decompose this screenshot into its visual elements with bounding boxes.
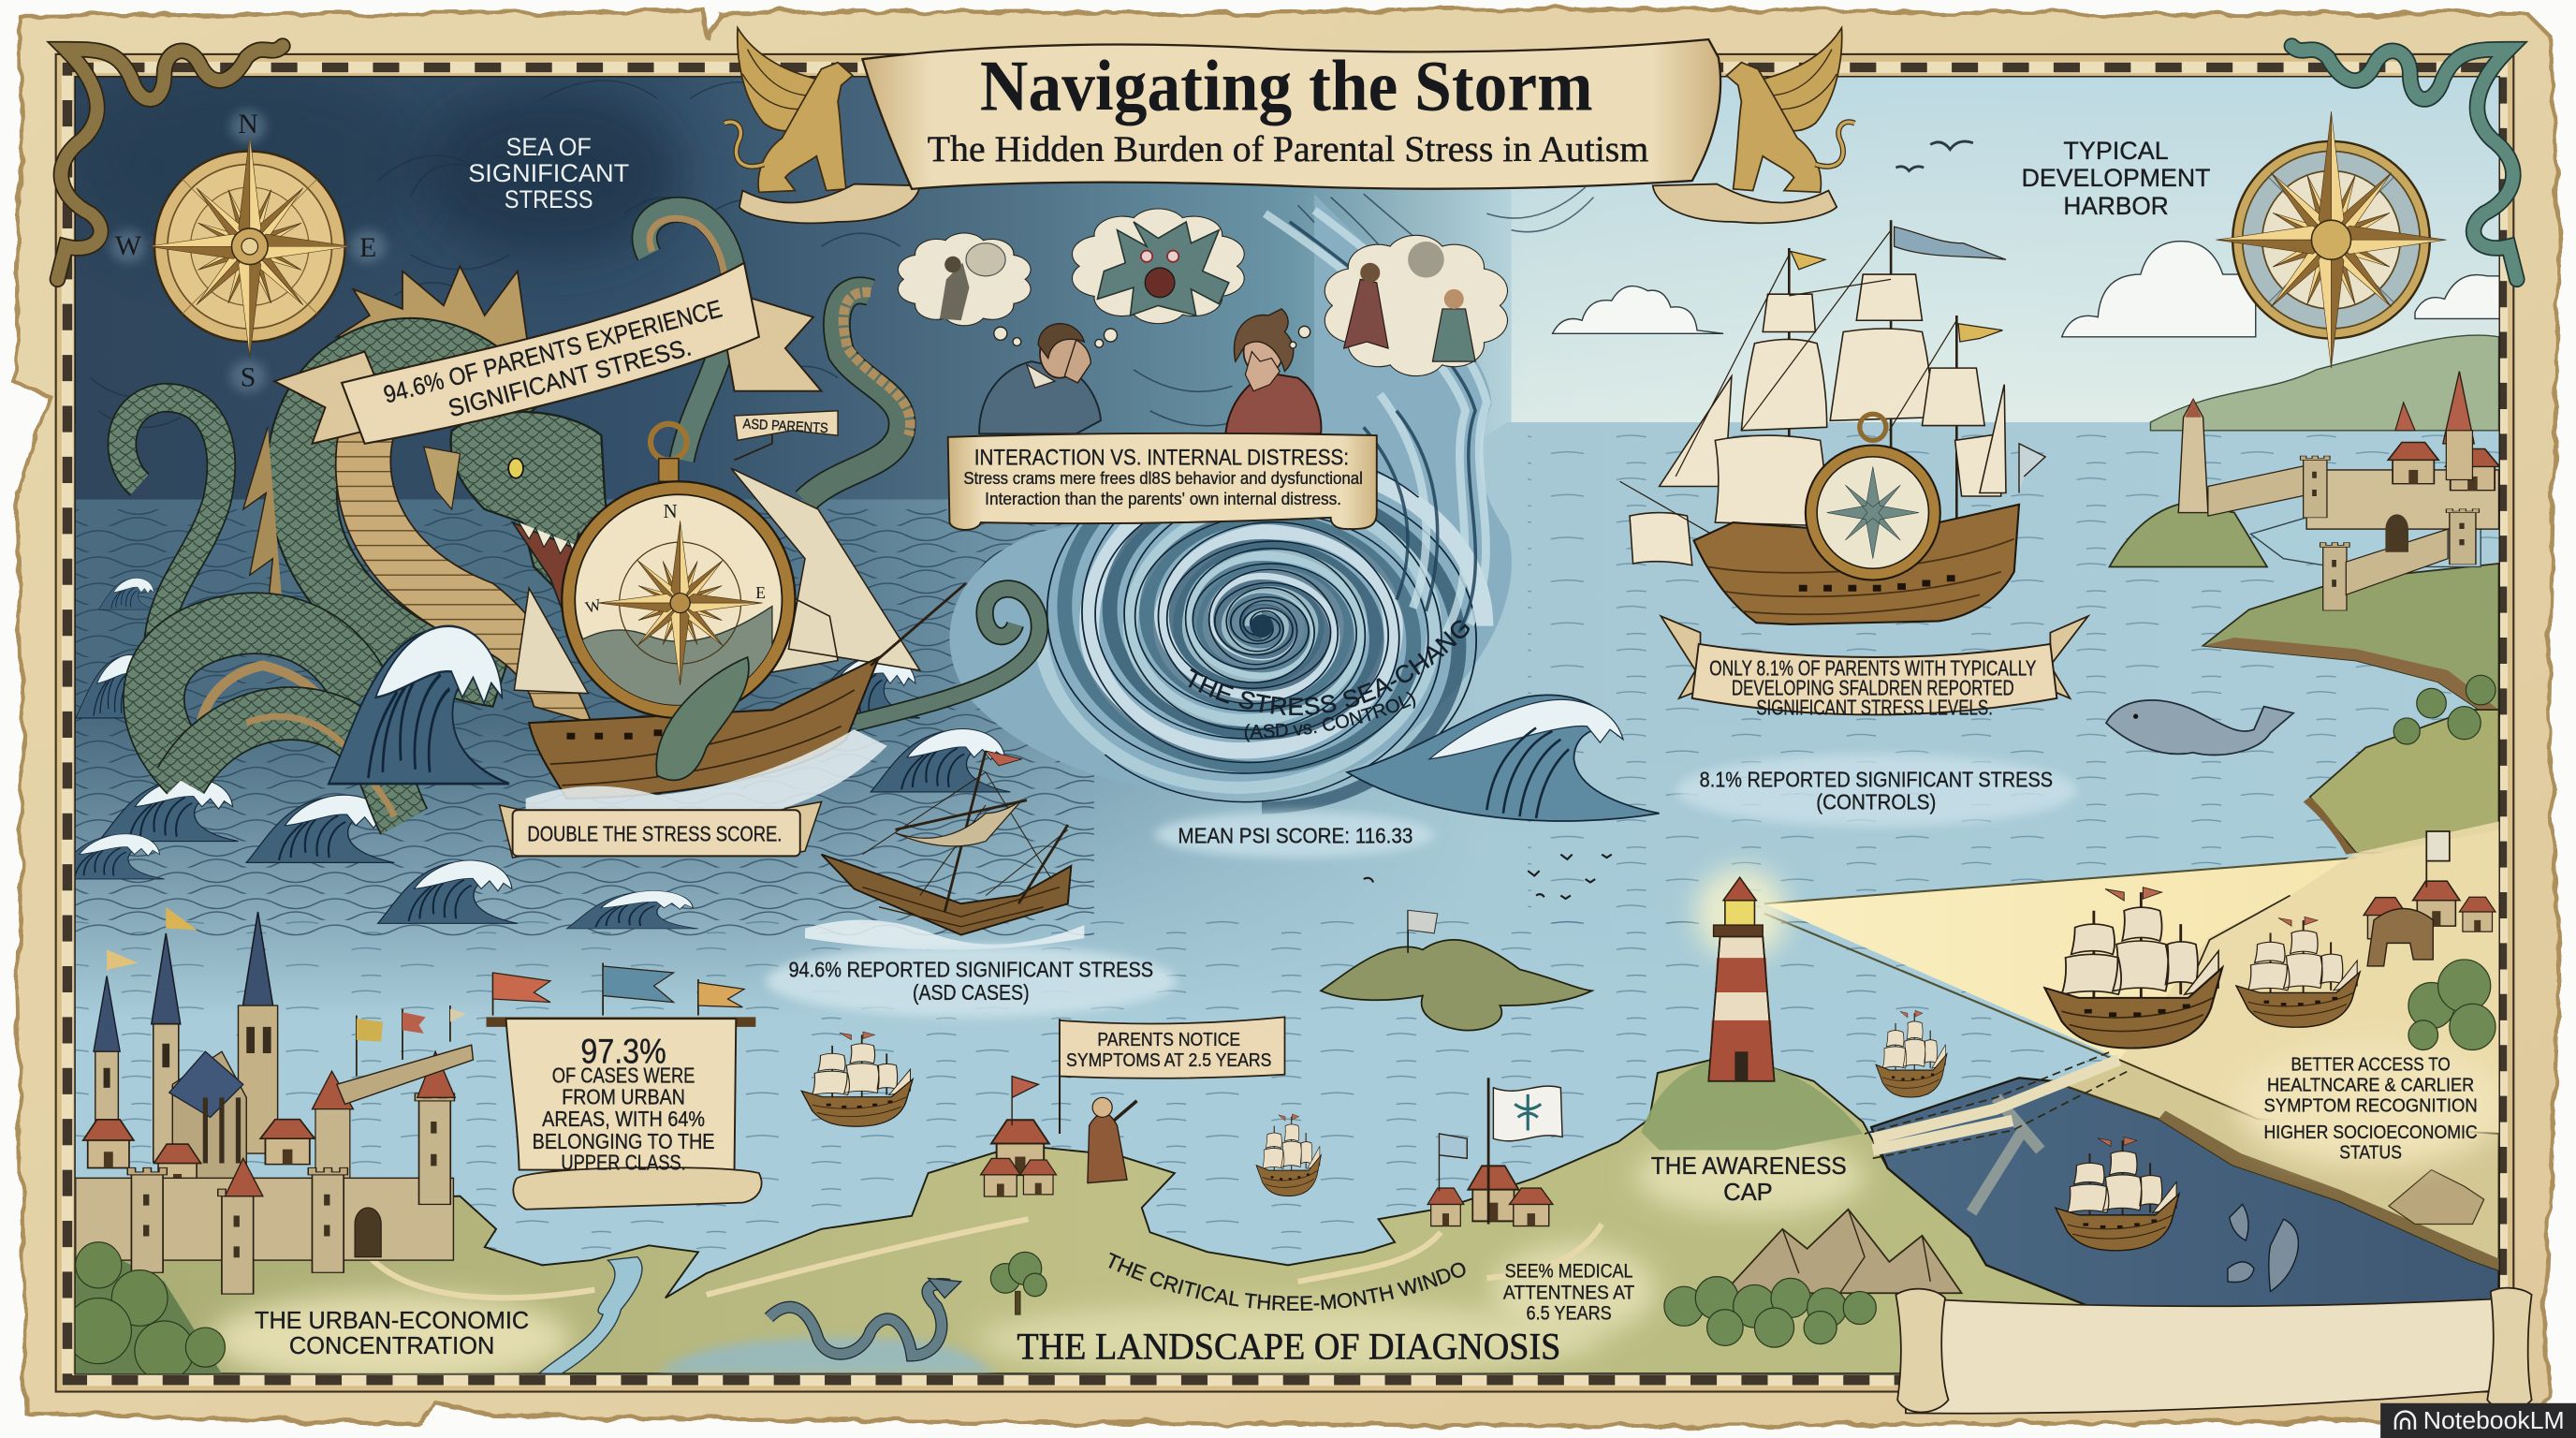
woman face in hands	[1225, 309, 1321, 433]
better access label	[2264, 1054, 2478, 1163]
region label: sea of significant stress	[468, 132, 629, 213]
awareness cap label: CAP	[1723, 1178, 1773, 1206]
region label: typical development harbor	[2022, 136, 2210, 220]
controls stress label	[1676, 755, 2076, 827]
thought bubbles	[898, 209, 1508, 376]
main fair-weather ship	[1620, 220, 2045, 624]
stormy sea waves	[50, 509, 1094, 936]
left compass rose: E	[359, 232, 376, 263]
parents notice banner	[1060, 1017, 1284, 1078]
region label: typical development harbor: DEVELOPMENT	[2022, 163, 2210, 192]
better access label: HIGHER SOCIOECONOMIC	[2264, 1123, 2478, 1143]
sea base	[76, 422, 2513, 1380]
harbour village and beach goods	[2364, 675, 2496, 1049]
bubble: woman's conflict	[1290, 235, 1508, 376]
right coast and sandy shore	[2304, 710, 2499, 855]
harbour lighthouse and walled town	[2178, 372, 2499, 610]
parent figures	[979, 309, 1321, 433]
corner serpent right	[2291, 46, 2517, 279]
urban statistics scroll: BELONGING TO THE	[533, 1129, 714, 1153]
double stress score banner	[500, 801, 822, 858]
small sailing ships	[801, 888, 2360, 1251]
whirlpool title: (ASD vs. CONTROL)	[1245, 692, 1415, 741]
urban statistics scroll: AREAS, WITH 64%	[542, 1107, 705, 1131]
interaction vs internal distress box: INTERACTION VS. INTERNAL DISTRESS:	[974, 447, 1349, 471]
controls stress label: (CONTROLS)	[1816, 789, 1936, 814]
typical parents banner	[1661, 616, 2088, 719]
critical window curved label: THE CRITICAL THREE-MONTH WINDOW	[1108, 1253, 1466, 1311]
serpent coils	[154, 624, 404, 822]
empty legend scroll	[1895, 1288, 2532, 1414]
serpent body	[267, 318, 542, 707]
breaking wave beside whirlpool	[1347, 695, 1660, 821]
medical attention label: ATTENTNES AT	[1503, 1282, 1634, 1303]
main lighthouse	[1695, 868, 1788, 1081]
typical parents banner: ONLY 8.1% OF PARENTS WITH TYPICALLY	[1709, 655, 2036, 680]
ship in storm	[514, 420, 966, 830]
region label: sea of significant stress: SIGNIFICANT	[468, 158, 629, 187]
left compass rose: S	[241, 361, 256, 392]
urban statistics scroll: 97.3%	[580, 1033, 666, 1071]
serpent head	[424, 412, 611, 644]
bubble: man's memory	[898, 233, 1031, 345]
urban economic label: CONCENTRATION	[289, 1333, 494, 1359]
region label: typical development harbor: HARBOR	[2063, 191, 2169, 220]
left compass rose: W	[115, 230, 142, 261]
trees near road	[990, 1252, 1046, 1314]
title text: Navigating the Storm	[980, 46, 1593, 126]
urban economic label	[255, 1308, 529, 1359]
ship rigging	[1620, 230, 1956, 546]
ASD stress label	[766, 945, 1177, 1017]
marine creatures in the channel	[2228, 1204, 2298, 1291]
storm and fair sky	[69, 66, 2499, 500]
sea serpent	[122, 210, 1039, 822]
region label: typical development harbor: TYPICAL	[2063, 136, 2169, 165]
better access label: STATUS	[2339, 1142, 2402, 1163]
man head in hands	[979, 324, 1101, 433]
urban statistics scroll: OF CASES WERE	[552, 1064, 695, 1088]
sinking ship	[805, 751, 1084, 949]
forest lower left	[66, 1242, 225, 1380]
NotebookLM badge: NotebookLM	[2423, 1406, 2565, 1434]
right compass rose	[2217, 111, 2446, 368]
serpent banner: 94.6% OF PARENTS EXPERIENCE	[381, 294, 724, 409]
green island with flag	[1321, 855, 1612, 1031]
ASD parents flag	[735, 411, 838, 440]
medical attention label: 6.5 YEARS	[1526, 1302, 1612, 1324]
right griffin	[1727, 28, 1855, 192]
whirlpool title	[1189, 620, 1470, 741]
ASD parents flag: ASD PARENTS	[742, 417, 828, 436]
compass pocket watch over storm ship	[562, 424, 795, 780]
compass pocket watch over storm ship: W	[583, 594, 604, 617]
ship masts and flags	[1789, 220, 2006, 542]
lower sea serpent	[768, 1278, 961, 1356]
parent village on headland	[981, 1019, 1137, 1196]
better access label: BETTER ACCESS TO	[2291, 1054, 2451, 1075]
critical window curved label	[1108, 1253, 1466, 1311]
better access label: SYMPTOM RECOGNITION	[2264, 1095, 2478, 1116]
ship sails	[1630, 274, 2006, 565]
compass pocket watch over storm ship: N	[663, 500, 678, 522]
river and lower marsh	[539, 1257, 996, 1373]
awareness cap label	[1651, 1152, 1847, 1206]
left castle city	[76, 907, 473, 1294]
region label: sea of significant stress: STRESS	[505, 184, 593, 213]
left griffin	[724, 28, 853, 192]
double stress score banner: DOUBLE THE STRESS SCORE.	[527, 822, 782, 846]
ASD stress label: 94.6% REPORTED SIGNIFICANT STRESS	[788, 957, 1153, 981]
serpent banner	[274, 263, 822, 444]
dolphin	[2106, 700, 2293, 755]
scroll body	[862, 39, 1720, 189]
dark channel	[1871, 1078, 2499, 1314]
medical attention label	[1503, 1261, 1634, 1324]
mean PSI score label	[1155, 812, 1434, 858]
controls stress label: 8.1% REPORTED SIGNIFICANT STRESS	[1700, 768, 2053, 792]
serpent crest fin	[337, 266, 529, 353]
clouds on fair sky	[1553, 242, 2504, 337]
urban statistics scroll: FROM URBAN	[562, 1084, 685, 1108]
landscape of diagnosis heading: THE LANDSCAPE OF DIAGNOSIS	[1017, 1325, 1560, 1367]
serpent upper curled tentacles	[645, 210, 910, 501]
ship hull	[1694, 444, 2045, 624]
seabirds	[1895, 141, 1973, 171]
interaction vs internal distress box	[948, 433, 1377, 530]
lighthouse light beam	[1764, 822, 2499, 1133]
mean PSI score label: MEAN PSI SCORE: 116.33	[1178, 823, 1412, 847]
medical village and flag	[1427, 1078, 1562, 1226]
serpent banner: SIGNIFICANT STRESS.	[446, 332, 695, 422]
parents notice banner: SYMPTOMS AT 2.5 YEARS	[1066, 1050, 1271, 1071]
region label: sea of significant stress: SEA OF	[506, 132, 592, 161]
scroll flags	[493, 962, 744, 1016]
NotebookLM badge	[2380, 1403, 2576, 1438]
left compass rose	[110, 109, 386, 392]
title scroll	[739, 39, 1837, 223]
urban statistics scroll: UPPER CLASS.	[561, 1151, 686, 1175]
typical parents banner: DEVELOPING SFALDREN REPORTED	[1732, 675, 2014, 699]
bubble: stress monster	[1072, 209, 1244, 347]
stress whirlpool	[949, 195, 1512, 814]
ASD stress label: (ASD CASES)	[913, 980, 1030, 1005]
better access label: HEALTNCARE & CARLIER	[2267, 1075, 2474, 1095]
left compass rose: N	[238, 109, 258, 139]
medical attention label: SEE% MEDICAL	[1505, 1261, 1633, 1283]
mountains and forest lower right	[1664, 1210, 1962, 1347]
ship compass	[1806, 414, 1940, 580]
tall storm wave foreground	[329, 626, 509, 784]
awareness cap label: THE AWARENESS	[1651, 1152, 1847, 1180]
urban statistics scroll	[487, 962, 762, 1210]
interaction vs internal distress box: Stress crams mere frees dl8S behavior and dysfunctional	[963, 468, 1363, 488]
typical parents banner: SIGNIFICANT STRESS LEVELS.	[1756, 695, 1993, 719]
right lower land	[1865, 1042, 2506, 1270]
scroll tails	[739, 184, 1837, 223]
serpent belly	[336, 381, 592, 723]
compass pocket watch over storm ship: E	[755, 583, 766, 602]
fair-weather headland and harbour land	[2110, 335, 2499, 723]
landscape of diagnosis land mass	[76, 1055, 2110, 1385]
corner serpent left	[57, 46, 283, 279]
interaction vs internal distress box: Interaction than the parents' own internal distress.	[985, 489, 1341, 508]
parents notice banner: PARENTS NOTICE	[1097, 1030, 1240, 1050]
serpent lower right tentacle	[855, 589, 1039, 723]
serpent far tentacle	[122, 398, 221, 657]
urban economic label: THE URBAN-ECONOMIC	[255, 1308, 529, 1334]
subtitle text: The Hidden Burden of Parental Stress in Autism	[928, 130, 1648, 169]
